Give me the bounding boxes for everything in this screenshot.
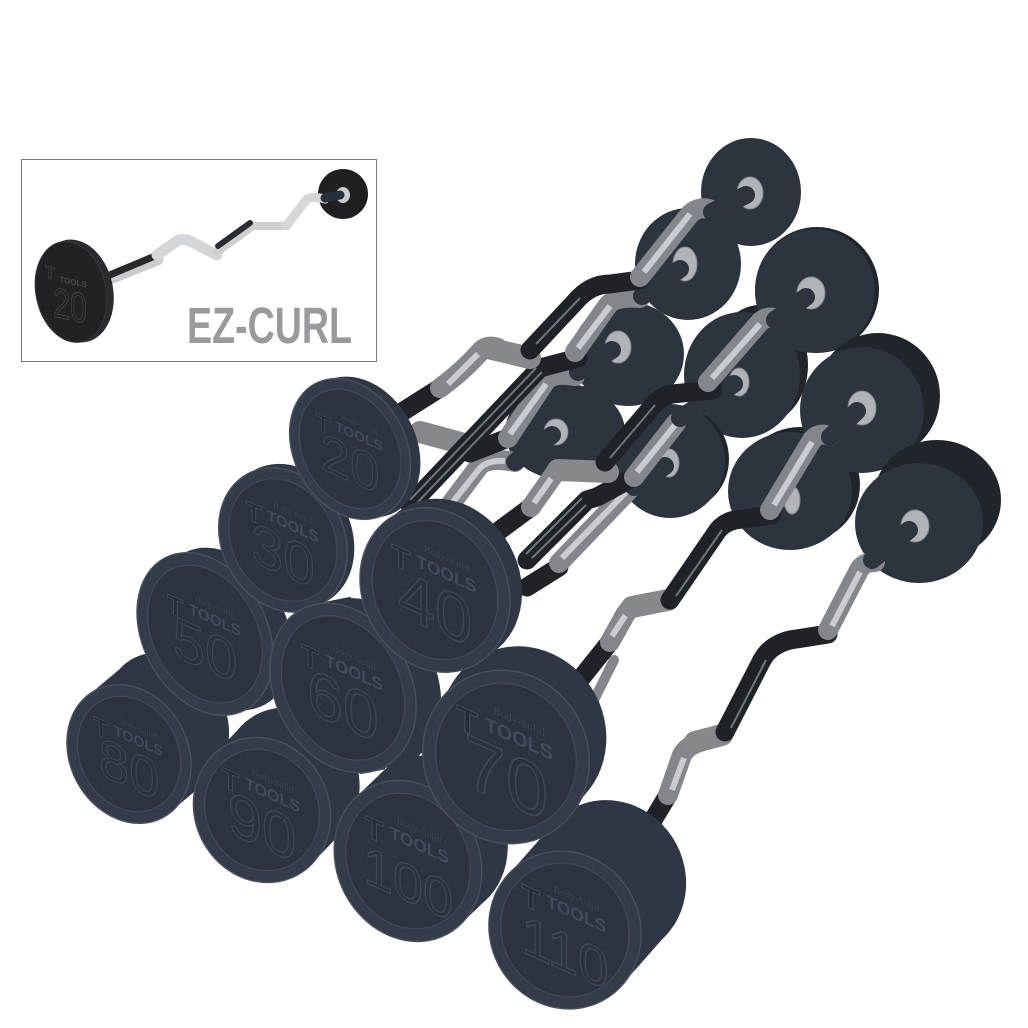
- plate 110: [461, 773, 714, 1028]
- plate 20: 20: [321, 421, 379, 506]
- plate 100: T: [365, 809, 383, 851]
- bar E: [500, 297, 806, 530]
- plate 110: TOOLS: [546, 890, 606, 937]
- plate 110: 110: [521, 903, 609, 1003]
- plate 80: 80: [99, 725, 159, 813]
- plate 100: Body-Solid: [397, 815, 442, 846]
- inset back plate: [318, 169, 368, 219]
- plate 90: [168, 683, 385, 907]
- plate 40: [332, 472, 550, 699]
- rear plate 5: [684, 305, 808, 438]
- rear plate 9: [800, 333, 940, 473]
- plate 50: T: [167, 588, 183, 625]
- plate 80: [43, 631, 253, 845]
- rear plate 7: [755, 227, 879, 353]
- front plates: [43, 355, 714, 1028]
- bar I: [650, 530, 909, 825]
- plate 30: 30: [251, 509, 315, 602]
- plate 70: T: [457, 697, 478, 745]
- rear plate 1: [701, 138, 801, 246]
- plate 40: T: [392, 537, 411, 580]
- plate 30: T: [246, 494, 262, 531]
- plate 30: TOOLS: [267, 508, 318, 547]
- bar A: [402, 195, 746, 412]
- plate 50: TOOLS: [189, 601, 241, 641]
- bar H: [578, 411, 857, 700]
- bar C: [420, 350, 612, 453]
- plate 90: TOOLS: [245, 774, 300, 817]
- plate 100: 100: [363, 833, 453, 933]
- plate 90: Body-Solid: [252, 767, 294, 796]
- plate 30: Body-Solid: [273, 499, 313, 527]
- plate 50: Body-Solid: [195, 593, 235, 620]
- plate 60: [241, 572, 470, 799]
- plate 80: T: [94, 710, 109, 746]
- bar B: [410, 269, 680, 505]
- rear plate 6: [615, 404, 729, 518]
- rear plate 3: [572, 302, 684, 406]
- plate 70: TOOLS: [485, 713, 553, 765]
- rear plate 8: [728, 427, 860, 550]
- inset front plate with 20: T: [45, 263, 55, 283]
- plate 90: 90: [228, 777, 296, 876]
- plate 40: 40: [398, 554, 472, 662]
- inset panel: single EZ-curl bar: [22, 160, 376, 362]
- plate 110: Body-Solid: [554, 884, 600, 915]
- inset label: EZ-CURL: EZ-CURL: [187, 297, 352, 354]
- rear plates: [505, 138, 1001, 583]
- plate 80: Body-Solid: [120, 715, 158, 741]
- rear plate 2: [635, 208, 741, 320]
- inset bar: [105, 195, 340, 280]
- plate 40: TOOLS: [416, 550, 476, 597]
- bars: [402, 195, 909, 825]
- plate 20: TOOLS: [335, 419, 383, 455]
- plate 50: 50: [173, 603, 237, 696]
- bar D: [450, 435, 552, 505]
- plate 20: T: [316, 408, 331, 441]
- plate 70: [392, 617, 637, 873]
- plate 20: Body-Solid: [341, 412, 377, 437]
- inset front plate with 20: [26, 232, 123, 350]
- plate 90: T: [222, 762, 239, 801]
- rear plate 4: [505, 384, 625, 480]
- plate 60: Body-Solid: [332, 643, 376, 673]
- plate 50: [110, 524, 319, 739]
- plate 100: TOOLS: [390, 823, 449, 868]
- plate 60: T: [301, 638, 319, 678]
- plate 100: [306, 729, 536, 968]
- plate 60: TOOLS: [325, 650, 383, 695]
- bar F: [527, 466, 665, 587]
- rear plate 10: [855, 440, 1001, 583]
- bar G: [526, 384, 734, 560]
- plate 70: 70: [464, 716, 548, 838]
- plate 60: 60: [307, 654, 379, 758]
- plate 30: [194, 441, 379, 635]
- plate 70: Body-Solid: [493, 704, 545, 739]
- plate 20: [266, 355, 444, 541]
- plate 110: T: [522, 877, 541, 920]
- inset front plate with 20: TOOLS: [59, 275, 87, 290]
- inset front plate with 20: 20: [53, 279, 87, 333]
- plate 40: Body-Solid: [424, 544, 470, 575]
- plate 80: TOOLS: [114, 722, 163, 760]
